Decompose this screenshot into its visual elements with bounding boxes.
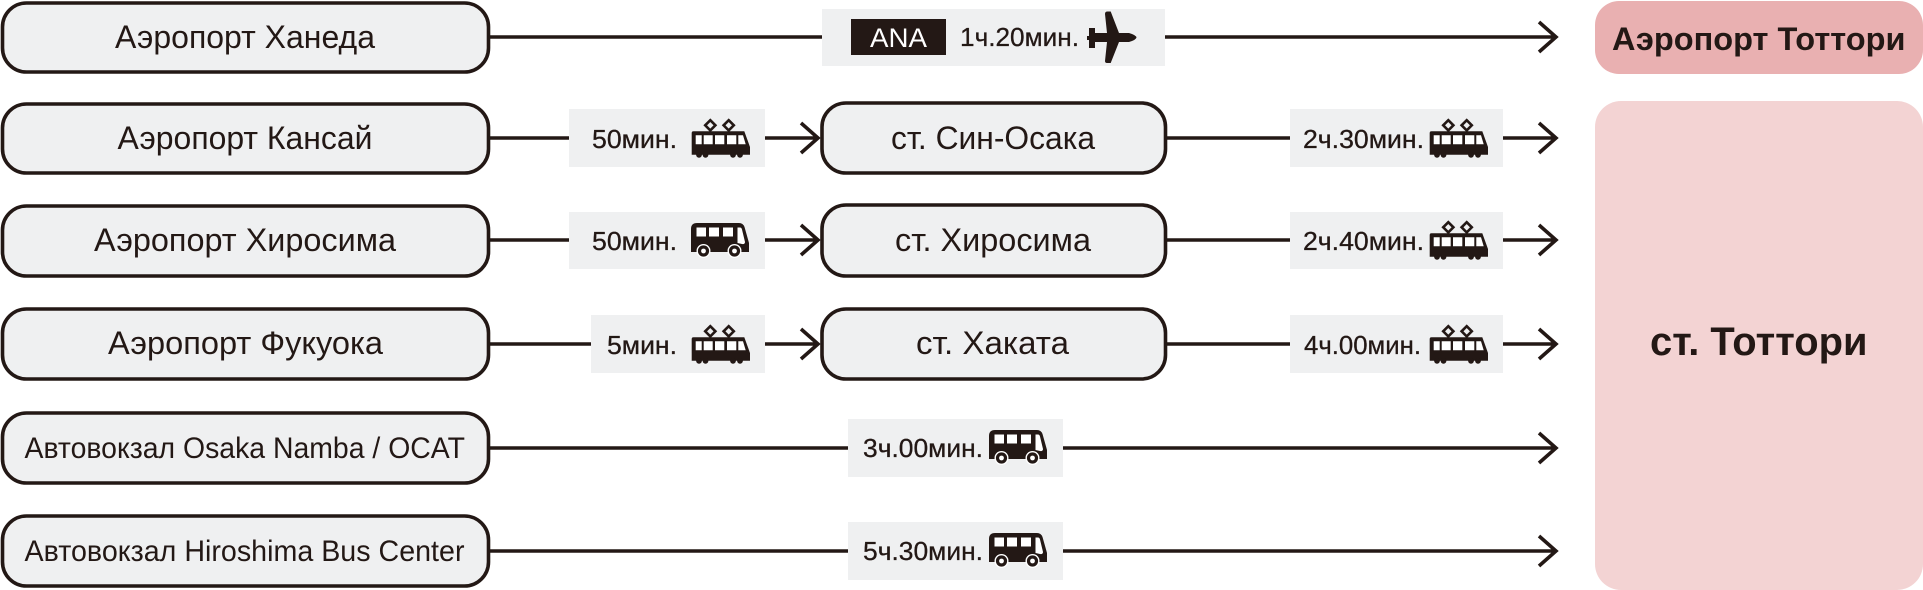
icon: train: [692, 120, 750, 158]
station box: Hiroshima: ст. Хиросима: [895, 222, 1091, 258]
origin box: Hiroshima Airport: [2, 206, 488, 276]
origin box: Hiroshima Bus Center: [2, 516, 488, 586]
label: 4h00 by train: [1290, 315, 1503, 373]
icon: train: [1430, 222, 1488, 260]
label: 2h30 by train: [1290, 109, 1503, 167]
label: 5 minutes by train: 5мин.: [607, 330, 677, 360]
origin box: Fukuoka Airport: [2, 309, 488, 379]
arrow: [1165, 22, 1556, 52]
origin box: Haneda Airport: Аэропорт Ханеда: [115, 19, 375, 55]
icon: train: [1430, 120, 1488, 158]
origin box: Hiroshima Bus Center: Автовокзал Hiroshima Bus Center: [24, 535, 465, 568]
label: 50 minutes by train: 50мин.: [592, 124, 677, 154]
icon: train: [692, 326, 750, 364]
label: 50 minutes by train: [569, 109, 765, 167]
label: 2h40 by train: 2ч.40мин.: [1303, 226, 1424, 256]
origin box: Haneda Airport: [2, 3, 488, 72]
label: 2h40 by train: [1290, 212, 1503, 269]
origin box: Fukuoka Airport: Аэропорт Фукуока: [108, 325, 383, 361]
arrow: [489, 433, 1556, 463]
icon: bus: [691, 223, 749, 258]
arrow: [489, 329, 818, 359]
connector line: [489, 35, 822, 39]
label: 5h30 by bus: 5ч.30мин.: [863, 536, 983, 566]
label: 4h00 by train: 4ч.00мин.: [1304, 330, 1421, 360]
label: 3h00 by bus: 3ч.00мин.: [863, 433, 983, 463]
label: ANA flight time: [822, 9, 1165, 66]
origin box: Hiroshima Airport: Аэропорт Хиросима: [94, 222, 396, 258]
label: 5 minutes by train: [591, 315, 765, 373]
station box: Hakata: ст. Хаката: [916, 325, 1069, 361]
label: 3h00 by bus: [848, 419, 1063, 477]
label: 50 minutes by bus: [569, 212, 765, 269]
destination panel: Tottori Station: [1595, 101, 1923, 590]
arrow: [1166, 225, 1556, 255]
station box: Hiroshima: [822, 205, 1166, 276]
origin box: Osaka Namba / OCAT: [2, 413, 488, 483]
origin box: Kansai Airport: Аэропорт Кансай: [118, 120, 372, 156]
arrow: [489, 225, 818, 255]
arrow: [489, 123, 818, 153]
label: ANA flight time: ANA: [870, 23, 927, 53]
arrow: [1166, 329, 1556, 359]
station box: Hakata: [822, 309, 1166, 379]
arrow: [489, 536, 1556, 566]
icon: bus: [989, 533, 1047, 568]
row 6: Hiroshima Bus Center: [2, 516, 1556, 586]
row 4: Fukuoka Airport via Hakata: [2, 309, 1556, 379]
icon: train: [1430, 326, 1488, 364]
station box: Shin-Osaka: [822, 103, 1166, 173]
label: 50 minutes by bus: 50мин.: [592, 226, 677, 256]
destination panel: Tottori Station: ст. Тоттори: [1650, 320, 1868, 364]
label: 2h30 by train: 2ч.30мин.: [1303, 124, 1424, 154]
arrow: [1166, 123, 1556, 153]
label: ANA flight time: 1ч.20мин.: [960, 22, 1079, 52]
row 1: Haneda to Tottori Airport: [2, 1, 1923, 74]
station box: Shin-Osaka: ст. Син-Осака: [891, 120, 1095, 156]
origin box: Kansai Airport: [2, 104, 488, 173]
icon: airplane: [1087, 12, 1136, 63]
destination: Tottori Airport: Аэропорт Тоттори: [1612, 21, 1906, 57]
row 3: Hiroshima Airport via Hiroshima Station: [2, 205, 1556, 276]
destination: Tottori Airport: [1595, 1, 1923, 74]
icon: bus: [989, 430, 1047, 465]
row 5: Osaka Namba bus terminal: [2, 413, 1556, 483]
origin box: Osaka Namba / OCAT: Автовокзал Osaka Namba / OCAT: [24, 432, 465, 465]
label: 5h30 by bus: [848, 522, 1063, 580]
row 2: Kansai Airport via Shin-Osaka: [2, 103, 1556, 173]
